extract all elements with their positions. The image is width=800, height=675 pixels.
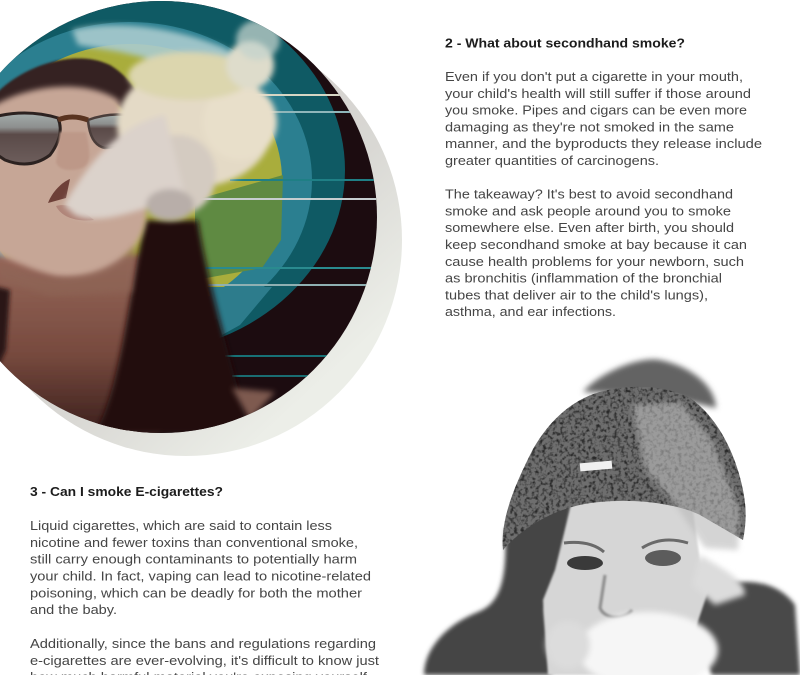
pom-pom	[583, 359, 716, 408]
sunglasses	[0, 112, 122, 166]
paragraph: liquid cigarettes: poisoning, which can be deadly for both the mother	[30, 585, 363, 600]
paragraph: the takeaway: cause health problems for your newborn, such	[445, 254, 744, 269]
paragraph: liquid cigarettes: still carry enough contaminants to potentially harm	[30, 552, 357, 567]
smoke over the mouth	[546, 555, 745, 675]
photo: woman in knit hat exhaling smoke, black and white	[424, 359, 800, 675]
photo: woman exhaling smoke in front of a painted wall	[0, 0, 402, 456]
ghost circle offset behind photo	[0, 24, 402, 456]
paragraph: the takeaway: asthma, and ear infections.	[445, 304, 616, 319]
paragraph: liquid cigarettes: and the baby.	[30, 602, 117, 617]
eyebrows and eyes	[564, 540, 688, 570]
paragraph: liquid cigarettes	[30, 518, 371, 617]
paragraph: bans and regulations: e-cigarettes are ever-evolving, it's difficult to know just	[30, 653, 379, 668]
paragraph: liquid cigarettes: your child. In fact, vaping can lead to nicotine-related	[30, 568, 371, 584]
hat label	[580, 461, 612, 471]
paragraph: child's health: your child's health will still suffer if those around	[445, 86, 751, 101]
heading: e-cigarettes: 3 - Can I smoke E-cigarettes?	[30, 484, 223, 499]
paragraph: child's health: greater quantities of carcinogens.	[445, 153, 659, 168]
shoulder	[232, 388, 275, 420]
paragraph: liquid cigarettes: Liquid cigarettes, which are said to contain less	[30, 518, 332, 533]
smoke cloud	[64, 20, 280, 221]
paragraph: the takeaway: tubes that deliver air to the child's lungs),	[445, 287, 708, 302]
right hair	[693, 582, 800, 675]
wall plank lines	[202, 94, 376, 377]
section 2 text block	[445, 36, 762, 319]
long dark hair	[95, 220, 250, 433]
paragraph: the takeaway: as bronchitis (inflammation of the bronchial	[445, 271, 722, 286]
knit hat	[503, 387, 746, 550]
nose	[56, 132, 89, 170]
paragraph: the takeaway: keep secondhand smoke at bay because it can	[445, 237, 747, 252]
left hair	[424, 490, 575, 675]
paragraph: child's health: Even if you don't put a cigarette in your mouth,	[445, 69, 743, 84]
nose	[600, 575, 632, 617]
paragraph: the takeaway: somewhere else. Even after birth, you should	[445, 220, 734, 235]
paragraph: child's health: damaging as they're not smoked in the same	[445, 119, 734, 134]
heading: secondhand smoke: 2 - What about secondhand smoke?	[445, 36, 685, 50]
circular photo	[0, 0, 390, 440]
paragraph: child's health: manner, and the byproducts they release include	[445, 136, 762, 151]
chin shadow	[64, 246, 136, 292]
painted wall rings	[0, 0, 390, 440]
frosted right side of hat	[632, 402, 740, 550]
paragraph: the takeaway: smoke and ask people around you to smoke	[445, 203, 731, 218]
left hair	[0, 285, 10, 385]
paragraph: child's health	[445, 69, 762, 168]
face	[0, 87, 147, 277]
paragraph: the takeaway	[445, 187, 747, 319]
chest and neck	[0, 255, 160, 435]
section 3 text block	[30, 484, 379, 675]
paragraph: child's health: you smoke. Pipes and cigars can be even more	[445, 103, 747, 118]
lips	[48, 179, 94, 220]
paragraph: bans and regulations	[30, 636, 379, 675]
face	[543, 490, 712, 675]
hair top	[0, 56, 136, 109]
paragraph: liquid cigarettes: nicotine and fewer toxins than conventional smoke,	[30, 535, 358, 550]
paragraph: bans and regulations: Additionally, since the bans and regulations regarding	[30, 636, 376, 651]
paragraph: the takeaway: The takeaway? It's best to avoid secondhand	[445, 187, 733, 202]
